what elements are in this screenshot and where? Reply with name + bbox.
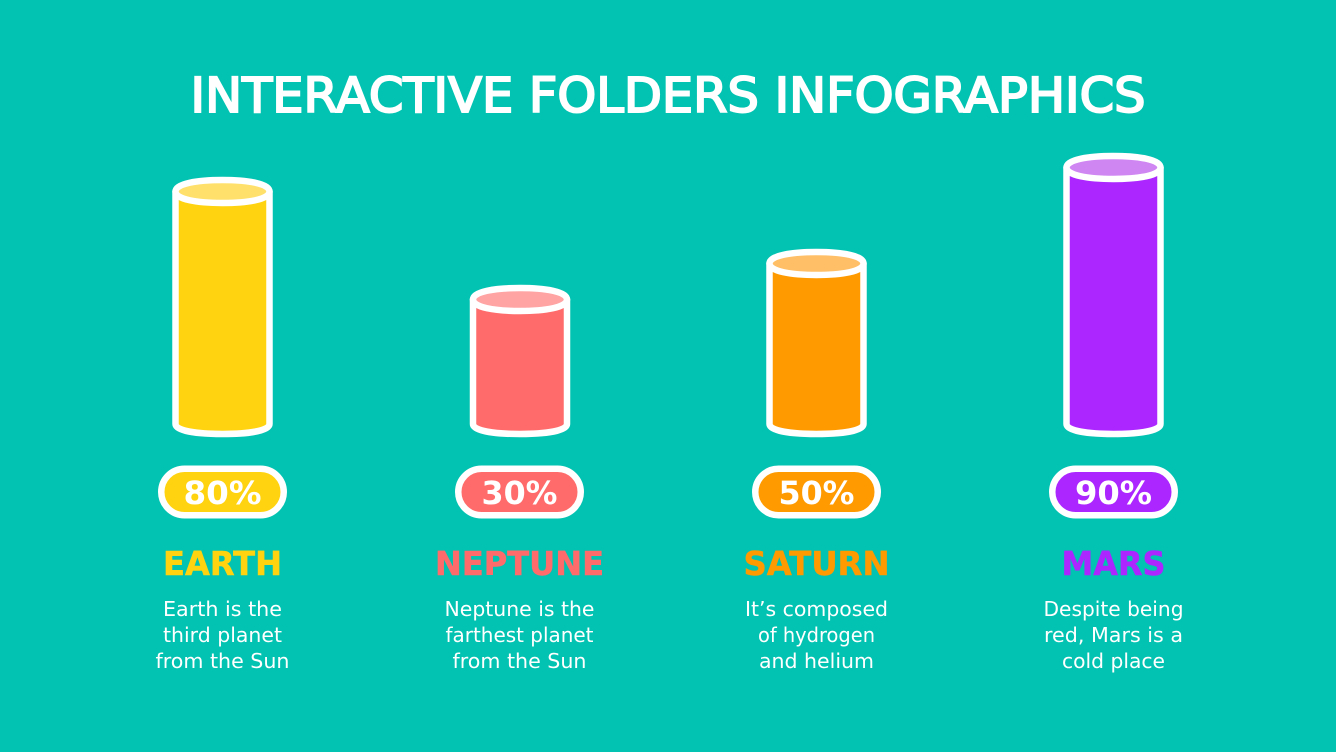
description: Saturn: of hydrogen xyxy=(758,623,875,647)
value pill: 80% xyxy=(161,469,284,515)
value pill: 90%: 90% xyxy=(1075,474,1152,512)
panel: Earth xyxy=(156,180,290,673)
cylinder: Earth 80% xyxy=(176,180,270,434)
description: Neptune: Neptune is the xyxy=(444,597,594,621)
description: Saturn: and helium xyxy=(759,649,874,673)
description: Mars: Despite being xyxy=(1044,597,1184,621)
panel: Neptune xyxy=(435,288,604,673)
value pill: 30%: 30% xyxy=(482,474,558,512)
description: Earth: Earth is the xyxy=(163,597,282,621)
description: Mars: red, Mars is a xyxy=(1044,623,1183,647)
title: INTERACTIVE FOLDERS INFOGRAPHICS xyxy=(190,68,1146,124)
heading: Earth: EARTH xyxy=(163,544,282,583)
panel: Saturn xyxy=(744,252,890,673)
cylinder: Neptune 30% xyxy=(473,288,567,434)
value pill: 50% xyxy=(755,469,878,515)
description: Earth: from the Sun xyxy=(156,649,290,673)
description: Earth: third planet xyxy=(163,623,282,647)
cylinder: Mars 90% xyxy=(1066,156,1160,434)
value pill: 30% xyxy=(458,469,581,515)
description: Neptune: from the Sun xyxy=(452,649,586,673)
description: Mars: cold place xyxy=(1062,649,1165,673)
description: Saturn: It’s composed xyxy=(745,597,888,621)
value pill: 80%: 80% xyxy=(184,474,262,512)
cylinder: Saturn 50% xyxy=(770,252,864,434)
heading: Mars: MARS xyxy=(1062,544,1166,583)
value pill: 90% xyxy=(1052,469,1175,515)
panel: Mars xyxy=(1044,156,1184,673)
heading: Saturn: SATURN xyxy=(744,544,890,583)
description: Neptune: farthest planet xyxy=(446,623,594,647)
value pill: 50%: 50% xyxy=(778,474,854,512)
heading: Neptune: NEPTUNE xyxy=(435,544,604,583)
